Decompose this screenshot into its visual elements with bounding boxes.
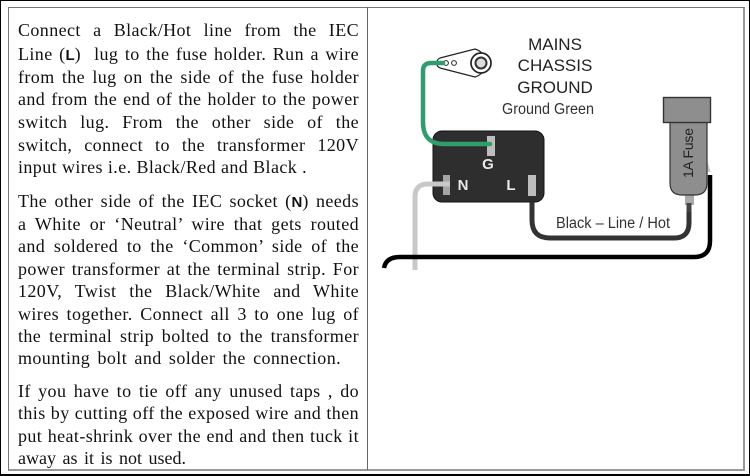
- text block: line and fuse wiring: switch, connect to the transformer 120V: [18, 135, 359, 155]
- fuse cap: [664, 98, 710, 122]
- lug: ground: [487, 136, 495, 156]
- text block: line and fuse wiring: input wires i.e. Black/Red and Black .: [18, 157, 307, 177]
- text block: line and fuse wiring: [18, 20, 359, 177]
- fuse tail: [685, 194, 694, 205]
- wire: black line to fuse: [532, 202, 689, 238]
- text block: line and fuse wiring: Connect a Black/Hot line from the IEC: [18, 20, 359, 40]
- text block: neutral wiring: a White or ‘Neutral’ wire that gets routed: [18, 214, 359, 234]
- text block: neutral wiring: the terminal strip bolted to the transformer: [18, 326, 359, 346]
- text block: neutral wiring: wires together. Connect all 3 to one lug of: [18, 304, 359, 324]
- text block: unused taps: [18, 381, 359, 468]
- lug: line: [528, 175, 536, 196]
- text block: unused taps: this by cutting off the exposed wire and then: [18, 403, 359, 423]
- label: black line / hot: Black – Line / Hot: [556, 215, 671, 232]
- letter L: L: [506, 177, 516, 194]
- text block: neutral wiring: mounting bolt and solder the connection.: [18, 348, 341, 368]
- letter G: G: [482, 156, 494, 173]
- text block: unused taps: If you have to tie off any unused taps , do: [18, 381, 359, 401]
- heading: mains chassis ground: CHASSIS: [518, 56, 592, 75]
- heading: mains chassis ground: GROUND: [517, 78, 593, 97]
- heading: mains chassis ground: MAINS: [528, 35, 582, 54]
- wire: ground green: [423, 63, 490, 144]
- wire: main black: [384, 175, 710, 268]
- text block: line and fuse wiring: from the lug on the side of the fuse holder: [18, 67, 359, 87]
- text block: line and fuse wiring: and from the end of the holder to the power: [18, 89, 359, 109]
- label: 1A Fuse: 1A Fuse: [680, 128, 696, 178]
- label: ground green: Ground Green: [502, 101, 594, 118]
- text block: neutral wiring: The other side of the IEC socket (N) needs: [18, 191, 359, 211]
- text block: line and fuse wiring: switch lug. From the other side of the: [18, 112, 359, 132]
- fuse body: [670, 122, 707, 195]
- text block: unused taps: put heat-shrink over the end and then tuck it: [18, 426, 359, 446]
- IEC socket: [433, 131, 544, 202]
- text block: neutral wiring: 120V, Twist the Black/White and White: [18, 281, 359, 301]
- wire: neutral grey: [415, 184, 450, 270]
- text block: unused taps: away as it is not used.: [18, 448, 186, 468]
- icon: chassis ground lug: [437, 49, 491, 77]
- text block: neutral wiring: [18, 191, 359, 368]
- fuse holder: [664, 98, 711, 212]
- heading: mains chassis ground: [517, 35, 593, 97]
- text panel: wiring instructions: [18, 20, 359, 468]
- lug: neutral: [443, 175, 450, 195]
- text block: neutral wiring: and soldered to the ‘Common’ side of the: [18, 236, 359, 256]
- letter N: N: [458, 177, 468, 194]
- fuse lug tip: [706, 158, 711, 172]
- text block: line and fuse wiring: Line (L) lug to the fuse holder. Run a wire: [18, 44, 359, 64]
- text block: neutral wiring: power transformer at the terminal strip. For: [18, 259, 359, 279]
